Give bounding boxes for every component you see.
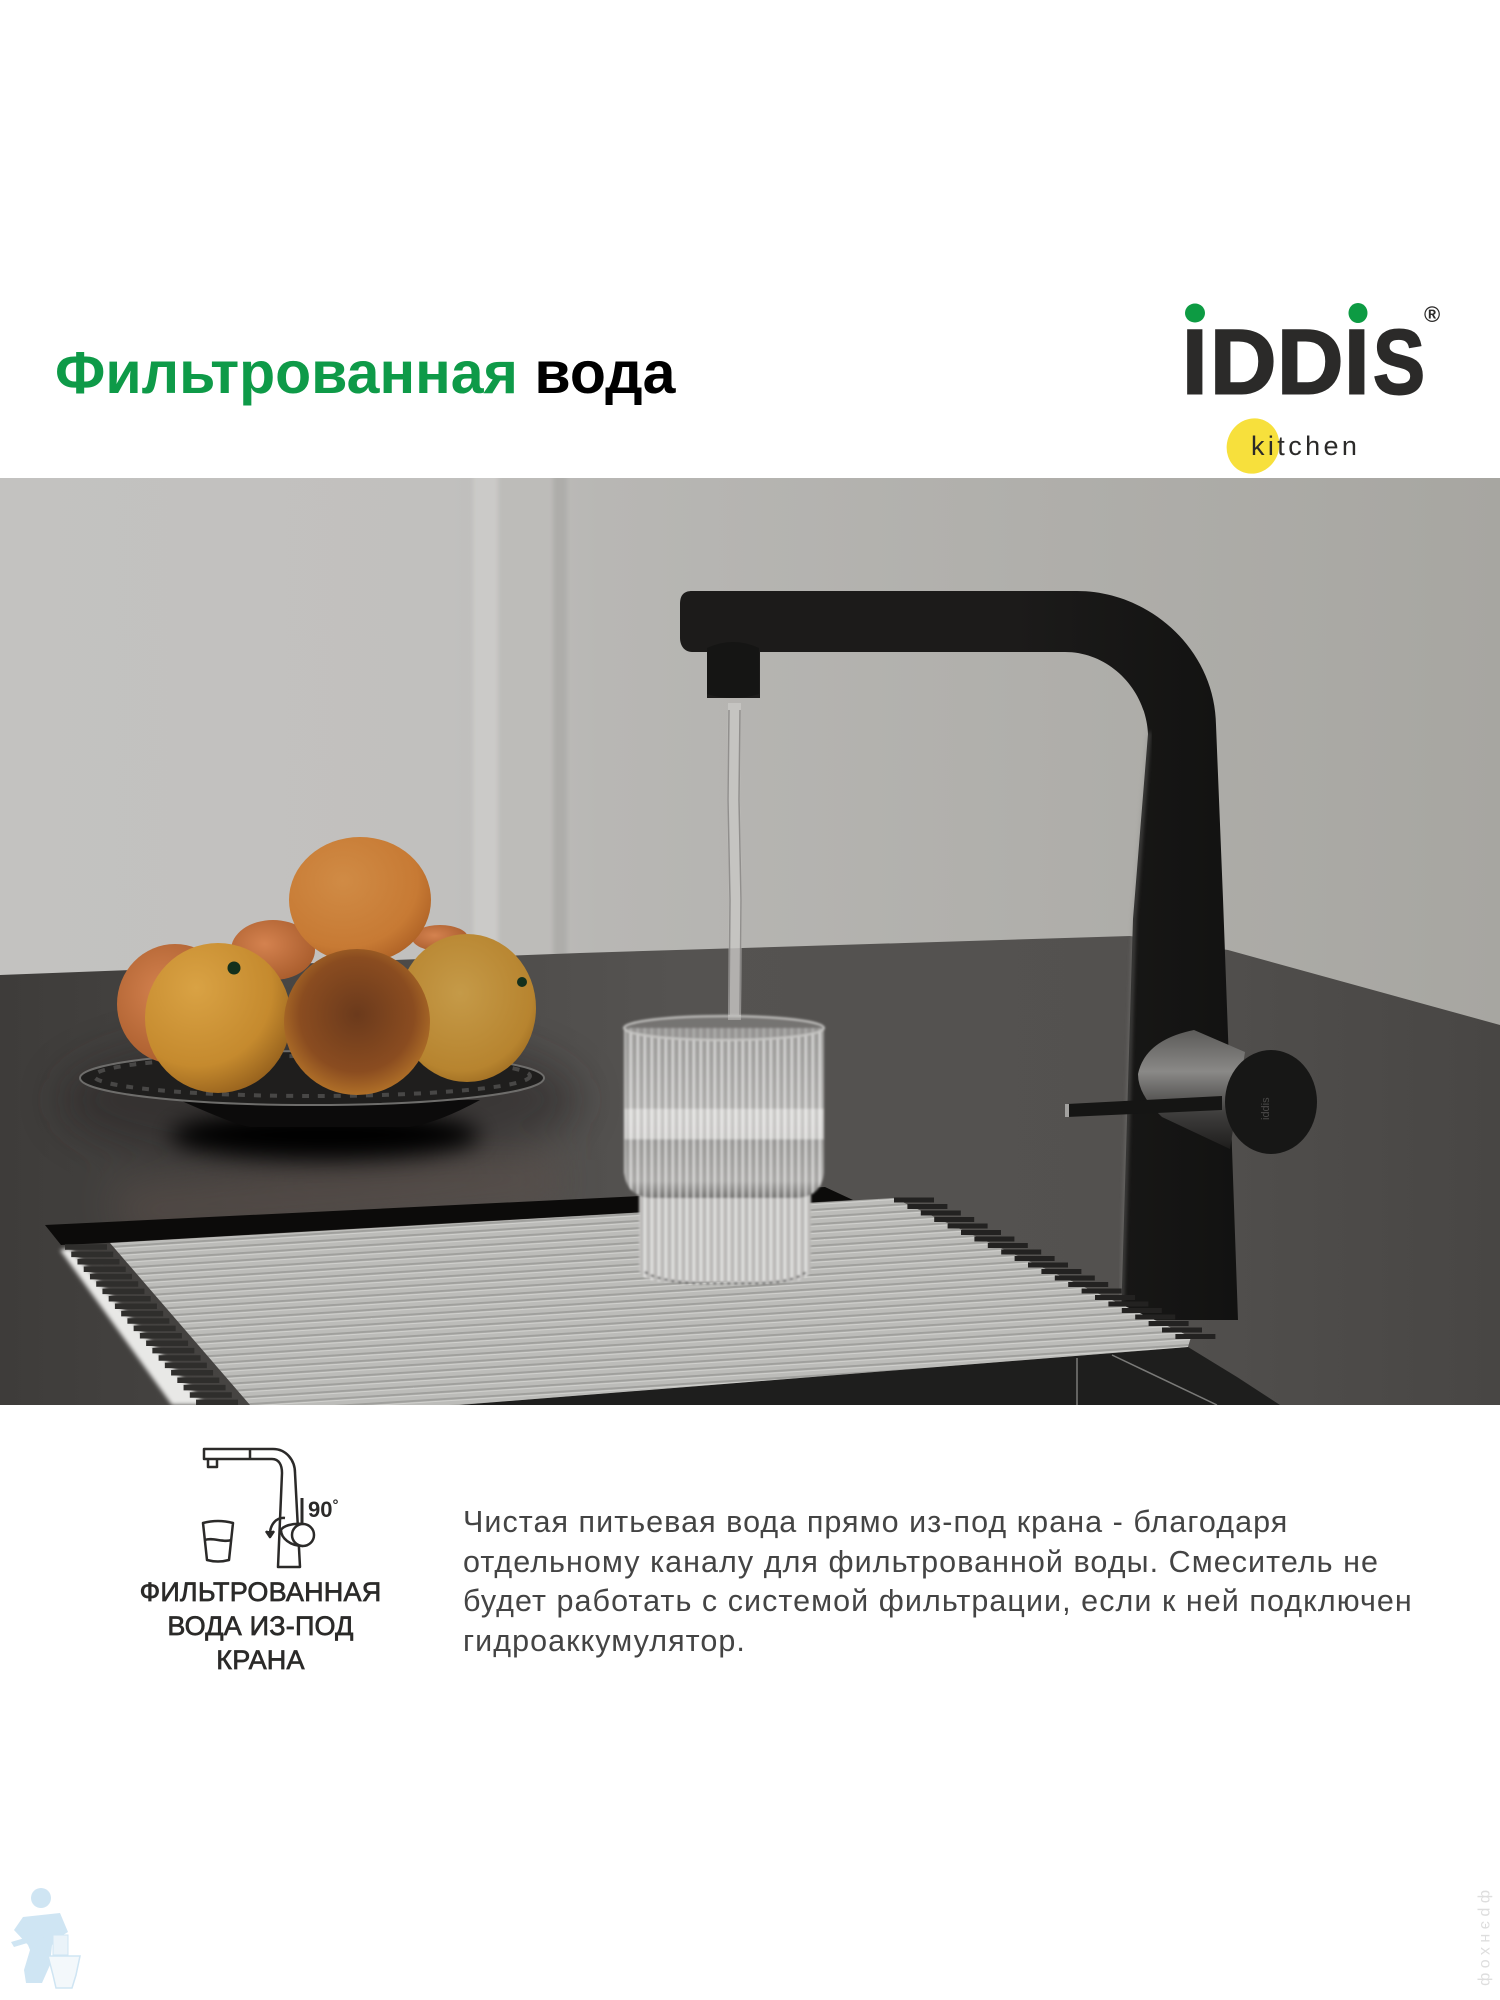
- logo: wordmark: IDDI: [1182, 312, 1370, 414]
- rack right caps: [894, 1200, 1215, 1336]
- icon: glass: [203, 1521, 233, 1562]
- plumber wrench: [11, 1933, 44, 1947]
- lever tip: [1065, 1104, 1069, 1117]
- photo: kitchen faucet filling a glass: [0, 478, 1500, 1405]
- handle lever: [1067, 1096, 1222, 1117]
- glass foot bottom edge: [645, 1272, 806, 1283]
- logo: wordmark: S: [1373, 312, 1425, 414]
- photo: sink: [45, 1187, 1280, 1405]
- description text: гидроаккумулятор.: [463, 1624, 746, 1658]
- faucet body: [680, 591, 1238, 1320]
- watermark: plumber with toilet: [11, 1888, 81, 1989]
- photo: wall moulding: [473, 470, 567, 960]
- handle cap: [1225, 1050, 1317, 1154]
- description text: [463, 1505, 1413, 1658]
- icon: arrow head: [266, 1531, 274, 1537]
- bowl pattern: [94, 1056, 530, 1096]
- description text: отдельному каналу для фильтрованной воды. Смеситель не: [463, 1545, 1379, 1579]
- photo: rack: [60, 1198, 1215, 1405]
- icon: 90 degree label: °: [332, 1497, 338, 1514]
- sink rim: [45, 1187, 853, 1245]
- sink edge lines: [1077, 1355, 1217, 1405]
- photo: bowl shadow: [170, 1111, 480, 1159]
- toilet bowl: [48, 1956, 80, 1988]
- rack left white edge: [60, 1248, 205, 1405]
- faucet nozzle: [707, 642, 759, 698]
- photo: ribbed glass: [624, 1016, 824, 1283]
- logo: green dots: [1185, 303, 1368, 323]
- logo: IDDIS kitchen: [1182, 302, 1440, 474]
- plumber head: [31, 1888, 51, 1908]
- toilet tank: [53, 1935, 68, 1955]
- handle cylinder: [1138, 1030, 1245, 1149]
- icon: spout divider and nozzle: [208, 1449, 250, 1467]
- orange: back middle: [231, 920, 315, 980]
- icon: faucet outline: [204, 1449, 300, 1567]
- icon: lever: [300, 1498, 304, 1523]
- orange: front middle: [284, 949, 430, 1095]
- orange: back left: [117, 944, 233, 1064]
- icon: handle cap: [292, 1524, 314, 1546]
- icon: 90 degree label: 90: [308, 1497, 332, 1522]
- photo: water stream: [727, 703, 742, 1020]
- photo: faucet: [680, 591, 1317, 1320]
- icon caption: ВОДА ИЗ-ПОД: [167, 1611, 354, 1641]
- glass foot: [639, 1190, 811, 1282]
- orange: right: [398, 934, 536, 1082]
- logo: registered mark: ®: [1424, 302, 1440, 327]
- icon caption: [140, 1577, 381, 1675]
- icon caption: ФИЛЬТРОВАННАЯ: [140, 1577, 381, 1607]
- watermark: vertical site name: фрэнхоф: [1477, 1890, 1494, 1990]
- photo: wall: [0, 478, 1500, 1038]
- icon caption: КРАНА: [216, 1645, 305, 1675]
- photo: fruit bowl: [80, 837, 544, 1127]
- logo: kitchen word: kitchen: [1251, 431, 1360, 461]
- rack left caps: [65, 1247, 238, 1402]
- photo: countertop: [0, 936, 1500, 1405]
- orange: back right: [412, 925, 468, 951]
- description text: Чистая питьевая вода прямо из-под крана - благодаря: [463, 1505, 1288, 1539]
- icon: rotation arrow: [270, 1518, 285, 1534]
- bowl rim: [80, 1051, 544, 1105]
- orange: front left: [145, 943, 291, 1093]
- icon: handle: [281, 1524, 303, 1546]
- bowl body: [175, 1098, 480, 1127]
- handle engraving: iddis: [1260, 1097, 1272, 1120]
- faucet left highlight: [1122, 732, 1149, 1300]
- glass rim: [624, 1016, 824, 1040]
- photo: counter reflections: [60, 1030, 580, 1235]
- sink dark basin: [459, 1347, 1280, 1405]
- orange stems: [228, 962, 527, 987]
- description text: будет работать с системой фильтрации, если к ней подключен: [463, 1584, 1413, 1618]
- logo: yellow blob: [1218, 410, 1288, 482]
- icon: filtered water faucet: [202, 1448, 338, 1568]
- title: Фильтрованная вода: [55, 340, 675, 406]
- glass body: [624, 1028, 824, 1198]
- plumber body: [14, 1913, 68, 1983]
- rack rods: [110, 1198, 1191, 1405]
- orange: top: [289, 837, 431, 963]
